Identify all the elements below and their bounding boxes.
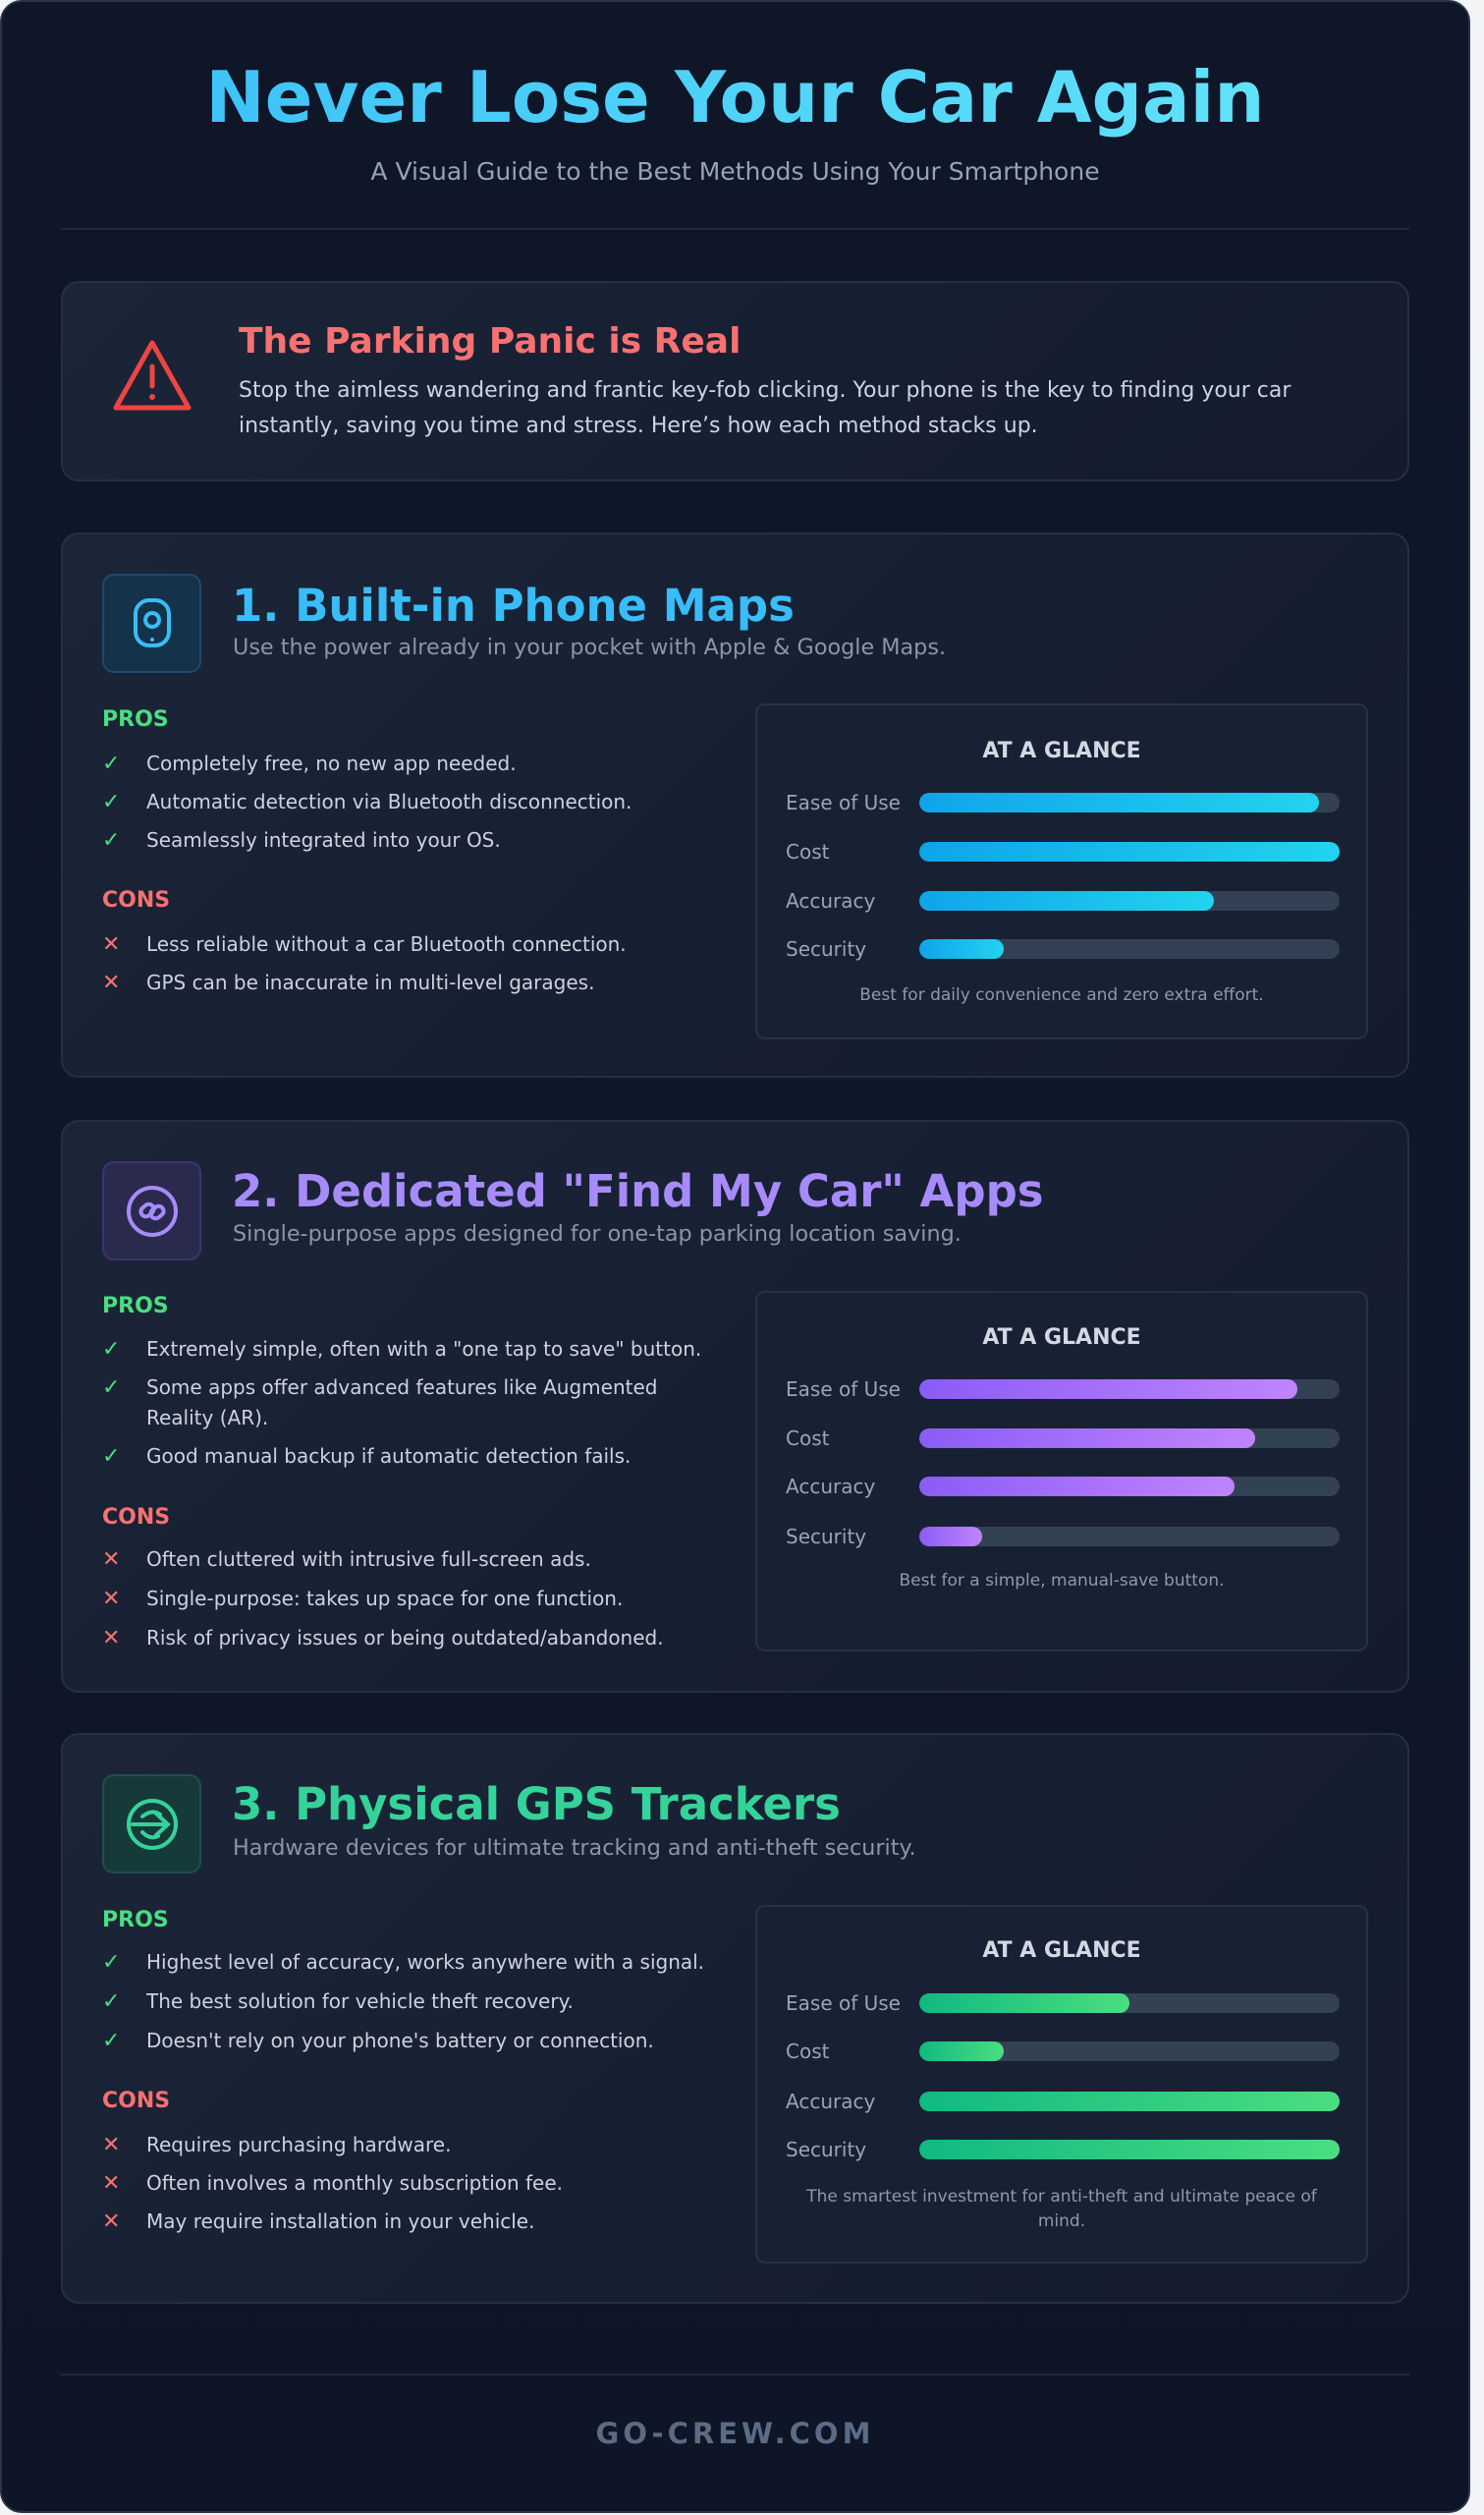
cons list: May require installation in your vehicle. — [146, 2209, 534, 2233]
pros list: Extremely simple, often with a "one tap to save" button. — [146, 1337, 701, 1361]
cons label: CONS — [102, 2089, 170, 2113]
chart: at a glance: Accuracy — [786, 1475, 875, 1498]
cons label: CONS — [102, 888, 170, 913]
panel: physical gps trackers — [61, 1733, 1409, 2304]
chart: at a glance: Cost — [786, 1426, 829, 1450]
chart: at a glance: AT A GLANCE — [982, 1325, 1141, 1350]
pros label: PROS — [102, 1294, 169, 1318]
chart: at a glance — [755, 1291, 1368, 1651]
pros label: PROS — [102, 1908, 169, 1932]
intro text — [239, 378, 1291, 438]
chart: at a glance: Ease of Use — [786, 1991, 901, 2015]
chart: at a glance: AT A GLANCE — [982, 1938, 1141, 1963]
pros list: ✓ — [102, 1444, 120, 1469]
cons label: CONS — [102, 1505, 170, 1530]
pros list — [102, 1950, 704, 2053]
cons list: ✕ — [102, 1626, 120, 1650]
intro heading: The Parking Panic is Real — [239, 321, 741, 362]
chart: at a glance: Cost — [786, 2040, 829, 2063]
pros list: Highest level of accuracy, works anywhere with a signal. — [146, 1950, 704, 1974]
pros list: Some apps offer advanced features like Augmented — [146, 1375, 657, 1399]
pros list: Reality (AR). — [146, 1406, 268, 1429]
chart: at a glance: The smartest investment for anti-theft and ultimate peace of — [806, 2187, 1317, 2207]
pros list: ✓ — [102, 1337, 120, 1362]
chart: at a glance: Best for a simple, manual-save button. — [899, 1571, 1225, 1591]
pros list: Automatic detection via Bluetooth disconnection. — [146, 790, 632, 813]
cons list: ✕ — [102, 2209, 120, 2234]
cons list: ✕ — [102, 1547, 120, 1572]
chart: at a glance: Accuracy — [786, 2090, 875, 2113]
cons list: GPS can be inaccurate in multi-level garages. — [146, 971, 594, 994]
chart: at a glance: Security — [786, 1525, 866, 1548]
subheading: Hardware devices for ultimate tracking and anti-theft security. — [233, 1835, 916, 1861]
subheading: Use the power already in your pocket with Apple & Google Maps. — [233, 635, 946, 660]
pros list: The best solution for vehicle theft recovery. — [146, 1989, 574, 2013]
cons list — [102, 1547, 664, 1650]
intro text: Stop the aimless wandering and frantic key-fob clicking. Your phone is the key to finding your car — [239, 378, 1291, 403]
subheading: Single-purpose apps designed for one-tap parking location saving. — [233, 1221, 962, 1247]
chart: at a glance: Accuracy — [786, 889, 875, 913]
chart: at a glance: Cost — [786, 840, 829, 864]
pros list: ✓ — [102, 1375, 120, 1400]
cons list — [102, 2133, 563, 2234]
pros list: Completely free, no new app needed. — [146, 752, 517, 775]
cons list: ✕ — [102, 2133, 120, 2157]
chart: at a glance — [755, 1905, 1368, 2264]
cons list: Often cluttered with intrusive full-screen ads. — [146, 1547, 591, 1571]
footer: GO-CREW.COM — [596, 2417, 874, 2450]
title: Never Lose Your Car Again — [205, 56, 1265, 139]
chart: at a glance: Ease of Use — [786, 791, 901, 814]
pros list — [102, 752, 632, 853]
cons list: Single-purpose: takes up space for one function. — [146, 1587, 623, 1610]
chart: at a glance: Ease of Use — [786, 1377, 901, 1401]
cons list — [102, 932, 627, 995]
panel: find my car apps — [61, 1120, 1409, 1693]
cons list: Less reliable without a car Bluetooth connection. — [146, 932, 627, 956]
cons list: Requires purchasing hardware. — [146, 2133, 451, 2156]
panel: parking panic intro — [61, 281, 1409, 481]
heading: 3. Physical GPS Trackers — [232, 1778, 841, 1830]
chart: at a glance: AT A GLANCE — [982, 739, 1141, 763]
pros list: Good manual backup if automatic detection fails. — [146, 1444, 631, 1468]
cons list: ✕ — [102, 971, 120, 995]
pros label: PROS — [102, 707, 169, 732]
chart: at a glance: Best for daily convenience and zero extra effort. — [859, 985, 1264, 1005]
icon: map pin — [102, 574, 201, 673]
cons list: Often involves a monthly subscription fee. — [146, 2171, 563, 2195]
pros list: ✓ — [102, 2029, 120, 2053]
cons list: ✕ — [102, 2171, 120, 2196]
chart: at a glance — [755, 703, 1368, 1039]
icon: warning triangle — [114, 340, 191, 411]
pros list: ✓ — [102, 752, 120, 776]
pros list: ✓ — [102, 790, 120, 814]
pros list: Doesn't rely on your phone's battery or connection. — [146, 2029, 654, 2052]
subtitle: A Visual Guide to the Best Methods Using Your Smartphone — [370, 157, 1100, 186]
chart: at a glance: Security — [786, 2138, 866, 2161]
heading: 2. Dedicated "Find My Car" Apps — [232, 1165, 1044, 1217]
icon: tracker — [102, 1774, 201, 1873]
pros list: Seamlessly integrated into your OS. — [146, 828, 501, 852]
pros list: ✓ — [102, 1989, 120, 2014]
panel: built-in phone maps — [61, 532, 1409, 1078]
heading: 1. Built-in Phone Maps — [232, 580, 795, 632]
pros list — [102, 1337, 701, 1469]
cons list: ✕ — [102, 1587, 120, 1611]
intro text: instantly, saving you time and stress. Here’s how each method stacks up. — [239, 414, 1038, 438]
cons list: ✕ — [102, 932, 120, 957]
cons list: Risk of privacy issues or being outdated/abandoned. — [146, 1626, 664, 1649]
icon: link app — [102, 1161, 201, 1260]
chart: at a glance: mind. — [1038, 2211, 1085, 2231]
pros list: ✓ — [102, 1950, 120, 1975]
chart: at a glance: Security — [786, 937, 866, 961]
pros list: ✓ — [102, 828, 120, 853]
